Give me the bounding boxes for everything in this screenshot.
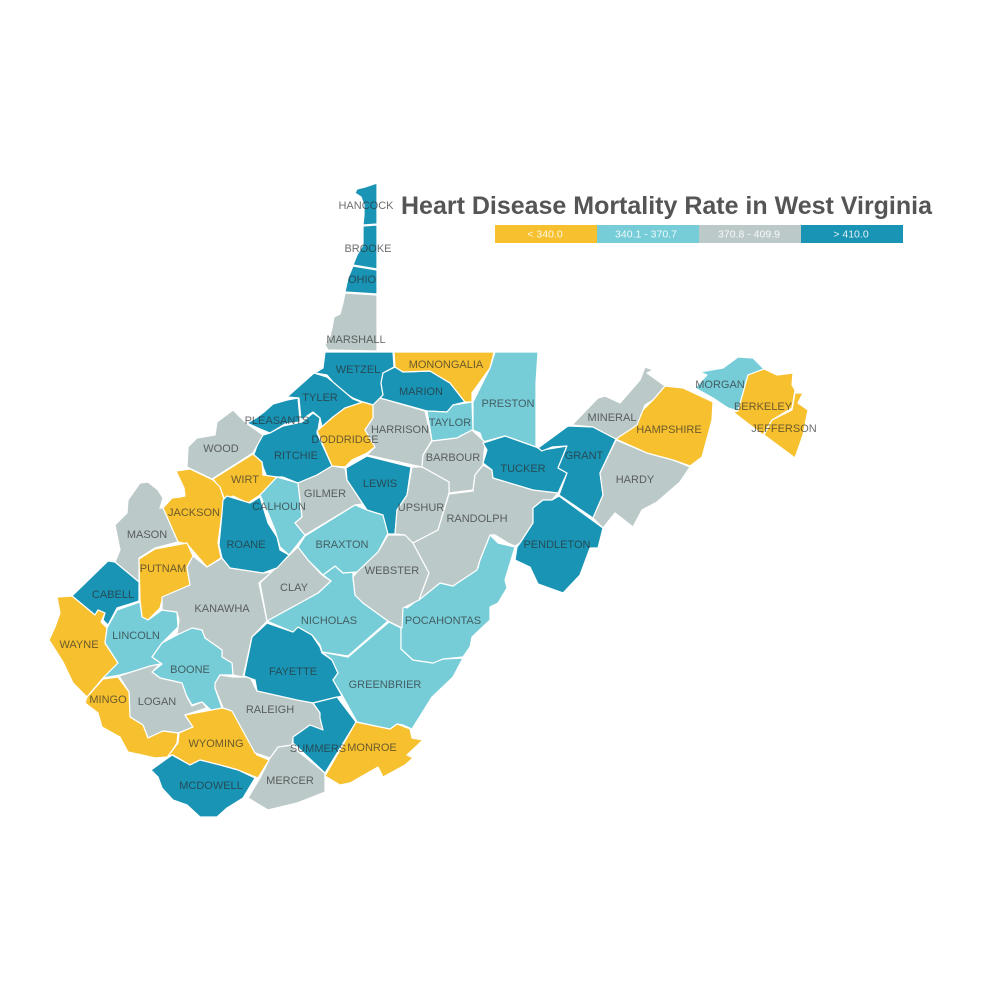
label: Logan: LOGAN — [138, 696, 176, 708]
label: Morgan: MORGAN — [695, 379, 745, 391]
legend item: 340.1 to 370.7: 340.1 - 370.7 — [615, 228, 677, 240]
label: Jefferson: JEFFERSON — [751, 423, 817, 435]
label: Wood: WOOD — [203, 443, 239, 455]
county: Clay — [260, 547, 331, 621]
county: Webster — [353, 535, 429, 628]
label: Pleasants: PLEASANTS — [245, 415, 309, 427]
label: Gilmer: GILMER — [304, 488, 346, 500]
county: Marshall — [325, 293, 377, 351]
label: Preston: PRESTON — [482, 398, 535, 410]
label: Pocahontas: POCAHONTAS — [405, 615, 481, 627]
label: Fayette: FAYETTE — [269, 666, 317, 678]
county: Monongalia — [394, 352, 494, 402]
legend item: over 410: > 410.0 — [833, 228, 869, 240]
county: Wayne — [49, 596, 118, 697]
label: Randolph: RANDOLPH — [446, 513, 508, 525]
county: Fayette — [244, 623, 342, 703]
county: Boone — [152, 628, 233, 712]
county: Taylor — [427, 402, 473, 441]
county: Preston — [473, 352, 538, 447]
county: Kanawha — [162, 556, 272, 677]
county: Summers — [293, 697, 356, 773]
label: Hampshire: HAMPSHIRE — [636, 424, 702, 436]
label: Nicholas: NICHOLAS — [301, 615, 357, 627]
county: Mingo — [85, 677, 178, 758]
label: Clay: CLAY — [280, 582, 309, 594]
county: Lincoln — [103, 602, 178, 678]
label: Pendleton: PENDLETON — [523, 539, 591, 551]
label: Braxton: BRAXTON — [316, 539, 369, 551]
county: Jackson — [163, 469, 224, 567]
county: Cabell — [72, 561, 139, 625]
county: Gilmer — [295, 466, 363, 535]
county: Hancock — [355, 183, 377, 225]
county: Pendleton — [515, 496, 603, 593]
legend — [495, 225, 903, 243]
county: Nicholas — [267, 566, 388, 656]
label: Lincoln: LINCOLN — [112, 630, 160, 642]
county: Braxton — [298, 505, 388, 575]
label: Marion: MARION — [399, 386, 443, 398]
label: Cabell: CABELL — [92, 589, 134, 601]
county: McDowell — [151, 755, 255, 817]
county: Logan — [119, 664, 207, 738]
label: Tyler: TYLER — [302, 392, 338, 404]
label: Webster: WEBSTER — [365, 565, 419, 577]
label: Wetzel: WETZEL — [336, 364, 380, 376]
label: Barbour: BARBOUR — [426, 452, 480, 464]
label: Summers: SUMMERS — [290, 743, 346, 755]
county: Tyler — [287, 373, 363, 427]
county: Mason — [115, 482, 178, 582]
county: Wirt — [213, 454, 277, 503]
label: Hardy: HARDY — [616, 474, 655, 486]
label: Lewis: LEWIS — [363, 478, 397, 490]
county: Wood — [187, 410, 263, 479]
county: Hardy — [593, 440, 690, 528]
county: Calhoun — [260, 477, 305, 555]
label: Harrison: HARRISON — [371, 424, 429, 436]
label: Greenbrier: GREENBRIER — [349, 679, 421, 691]
label: Wirt: WIRT — [231, 474, 259, 486]
county: Doddridge — [317, 402, 375, 467]
label: Jackson: JACKSON — [168, 507, 220, 519]
county: Wetzel — [315, 352, 394, 405]
label: Hancock: HANCOCK — [338, 200, 394, 212]
label: Wayne: WAYNE — [59, 639, 99, 651]
label: Berkeley: BERKELEY — [734, 401, 793, 413]
county labels — [59, 200, 817, 792]
county: Mercer — [248, 745, 325, 810]
legend item: under 340: < 340.0 — [527, 228, 563, 240]
county: Pleasants — [247, 398, 300, 433]
title: Heart Disease Mortality Rate in West Virginia — [401, 192, 933, 220]
label: Mason: MASON — [127, 529, 167, 541]
county: Randolph — [413, 465, 558, 600]
county: Monroe — [325, 722, 423, 785]
county: Grant — [538, 426, 616, 518]
county: Marion — [380, 367, 465, 412]
label: Grant: GRANT — [565, 450, 604, 462]
legend item: over 410 — [801, 225, 903, 243]
map: West Virginia counties — [49, 183, 808, 817]
legend item: 370.8 to 409.9 — [699, 225, 801, 243]
county: Lewis — [346, 456, 411, 534]
label: Putnam: PUTNAM — [140, 563, 186, 575]
county: Wyoming — [168, 708, 269, 778]
label: Mineral: MINERAL — [588, 412, 636, 424]
county: Tucker — [483, 436, 567, 493]
label: Calhoun: CALHOUN — [252, 501, 306, 513]
county: Mineral — [572, 367, 665, 439]
county: Putnam — [139, 543, 193, 620]
legend item: under 340 — [495, 225, 597, 243]
label: Raleigh: RALEIGH — [246, 704, 294, 716]
legend item: 340.1 to 370.7 — [597, 225, 699, 243]
label: Monongalia: MONONGALIA — [409, 359, 484, 371]
label: Ohio: OHIO — [348, 274, 376, 286]
label: Roane: ROANE — [226, 539, 266, 551]
label: McDowell: MCDOWELL — [179, 780, 243, 792]
county: Harrison — [365, 398, 432, 467]
label: Taylor: TAYLOR — [429, 417, 471, 429]
county: Ritchie — [253, 413, 332, 483]
label: Tucker: TUCKER — [500, 463, 546, 475]
county: Raleigh — [215, 675, 323, 758]
county: Pocahontas — [401, 535, 515, 663]
label: Wyoming: WYOMING — [188, 738, 244, 750]
county: Brooke — [353, 225, 377, 269]
county: Jefferson — [764, 393, 808, 458]
label: Monroe: MONROE — [347, 742, 397, 754]
county: Ohio — [345, 266, 377, 294]
label: Doddridge: DODDRIDGE — [311, 434, 379, 446]
label: Boone: BOONE — [170, 664, 210, 676]
label: Mingo: MINGO — [89, 694, 127, 706]
label: Kanawha: KANAWHA — [194, 603, 250, 615]
label: Brooke: BROOKE — [344, 243, 392, 255]
county: Greenbrier — [322, 622, 463, 729]
county: Berkeley — [733, 369, 795, 435]
county: Morgan — [695, 357, 764, 411]
label: Marshall: MARSHALL — [326, 334, 386, 346]
county: Hampshire — [616, 386, 713, 466]
label: Mercer: MERCER — [266, 775, 314, 787]
county: Roane — [219, 496, 289, 573]
label: Ritchie: RITCHIE — [274, 450, 318, 462]
legend item: 370.8 to 409.9: 370.8 - 409.9 — [718, 228, 780, 240]
county: Barbour — [422, 430, 485, 493]
county: Upshur — [395, 467, 449, 543]
label: Upshur: UPSHUR — [398, 502, 444, 514]
